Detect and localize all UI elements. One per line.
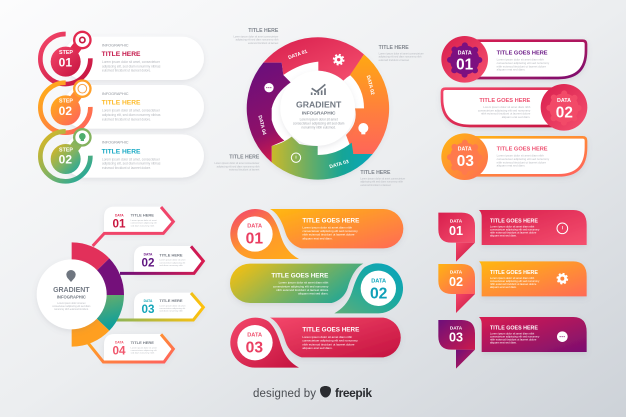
step 2 card: STEP bbox=[59, 99, 73, 105]
callout: title 2: Lorem ipsum dolor sit amet consectetuer bbox=[379, 52, 424, 55]
step 2 card: Lorem ipsum dolor sit amet, consectetuer bbox=[102, 109, 160, 113]
bar 02: nibh euismod tincidunt ut laoreet dolore bbox=[276, 288, 329, 292]
tag row 01: Lorem ipsum dolor sit amet diam nibh bbox=[490, 225, 535, 229]
step 2 card bbox=[40, 79, 204, 133]
panel: step list bbox=[40, 31, 204, 181]
tab 03: consectetuer adipiscing elit bbox=[159, 307, 186, 310]
step 3 card: adipiscing elit, sed diam nonummy nibhas bbox=[102, 162, 161, 166]
tab 04: 04 bbox=[113, 345, 126, 358]
callout: title 2 bbox=[379, 45, 424, 62]
step 3 card: STEP bbox=[59, 147, 73, 153]
step 1 card: 01 bbox=[59, 55, 72, 69]
banner 01 bbox=[441, 36, 586, 83]
callout: title 3: euismod tincidunt ut laoreet bbox=[229, 169, 260, 172]
step 1 card bbox=[40, 31, 204, 84]
step 3 card: TITLE HERE bbox=[102, 148, 141, 155]
tag row 02: DATA bbox=[450, 270, 463, 275]
tag row 01: consectetuer adipiscing elit sed nonummy bbox=[490, 228, 540, 232]
callout: title 2: TITLE HERE bbox=[379, 45, 409, 51]
callout: title 3: Lorem ipsum dolor sit amet consectetuer bbox=[214, 162, 259, 165]
centre circle: INFOGRAPHIC bbox=[57, 295, 86, 300]
bar 01: aliquam erat sed diam. bbox=[302, 236, 333, 240]
tag row 03: nibh euismod tincidunt ut laoreet dolore bbox=[490, 338, 537, 342]
bar 01: nibh euismod tincidunt ut laoreet dolore bbox=[302, 233, 355, 237]
tag row 03: DATA bbox=[450, 325, 463, 330]
centre circle: nonummy nibh euismod tincidunt. bbox=[54, 308, 89, 311]
tab 01: Lorem ipsum dolor sit amet bbox=[131, 219, 157, 222]
tag row 03: aliquam erat sed diam. bbox=[490, 341, 517, 345]
centre circle: Lorem ipsum dolor sit amet bbox=[57, 302, 86, 305]
attribution logo: designed by bbox=[253, 388, 316, 400]
banner 02: consectetuer adipiscing elit sed nonummy bbox=[478, 108, 531, 112]
tag row 02: aliquam erat sed diam. bbox=[490, 285, 517, 289]
step 3 card: Lorem ipsum dolor sit amet, consectetuer bbox=[102, 157, 160, 161]
tab 04: TITLE HERE bbox=[131, 340, 154, 345]
tag row 01: TITLE GOES HERE bbox=[490, 219, 538, 225]
tab 03: 03 bbox=[142, 303, 155, 316]
bar 03: TITLE GOES HERE bbox=[302, 327, 359, 334]
tag row 02 bbox=[438, 261, 587, 313]
step 3 card: 02 bbox=[59, 153, 72, 167]
tag row 03: TITLE GOES HERE bbox=[490, 326, 538, 332]
callout: title 1: euismod tincidunt ut laoreet bbox=[248, 42, 279, 45]
bar 01: consectetuer adipiscing elit sed nonummy bbox=[302, 229, 358, 233]
tab 01: consectetuer adipiscing elit bbox=[131, 222, 157, 225]
tab 01: DATA bbox=[115, 213, 124, 217]
tag row 01: DATA bbox=[450, 218, 463, 223]
chart: gradient donut bbox=[214, 28, 424, 187]
tab 04: Lorem ipsum dolor sit amet bbox=[131, 346, 157, 349]
callout: title 4 bbox=[360, 170, 405, 187]
centre label: GRADIENT bbox=[296, 99, 342, 109]
banner 03: TITLE GOES HERE bbox=[497, 147, 548, 153]
bar 02 bbox=[230, 263, 403, 313]
centre circle: consectetuer adipiscing elit sed diam bbox=[52, 305, 90, 308]
banner 02: nibh euismod tincidunt ut laoreet dolore bbox=[481, 112, 531, 116]
banner 02: 02 bbox=[556, 104, 573, 121]
tab 03: Lorem ipsum dolor sit amet bbox=[159, 304, 186, 307]
tag row 01: nibh euismod tincidunt ut laoreet dolore bbox=[490, 231, 537, 235]
tab 01: 01 bbox=[113, 217, 126, 230]
tab 01: TITLE HERE bbox=[131, 213, 154, 218]
banner 01: nibh euismod tincidunt ut laoreet dolore bbox=[497, 64, 546, 68]
banner 02: aliquam erat sed diam. bbox=[502, 115, 531, 119]
bar 03: nibh euismod tincidunt ut laoreet dolore bbox=[302, 342, 355, 346]
banner 03: aliquam erat sed diam. bbox=[497, 164, 525, 168]
step 2 card: 02 bbox=[59, 104, 72, 118]
bar 02: TITLE GOES HERE bbox=[271, 272, 328, 279]
bar 03: DATA bbox=[247, 332, 262, 338]
callout: title 3: TITLE HERE bbox=[229, 155, 260, 161]
step 1 card: adipiscing elit, sed diam nonummy nibhas bbox=[102, 64, 161, 68]
segment: data 01: DATA 01 bbox=[288, 49, 308, 61]
banner 01: 01 bbox=[456, 56, 474, 73]
callout: title 4: adipiscing elit sed diam nonummy nibh bbox=[360, 181, 404, 184]
callout: title 1: adipiscing elit sed diam nonummy nibh bbox=[236, 39, 279, 42]
attribution logo: freepik bbox=[335, 386, 372, 400]
step 2 card: INFOGRAPHIC bbox=[102, 92, 129, 96]
tag row 02: nibh euismod tincidunt ut laoreet dolore bbox=[490, 282, 537, 286]
callout: title 1: Lorem ipsum dolor sit amet consectetuer bbox=[233, 35, 278, 38]
banner 01: consectetuer adipiscing elit sed nonummy bbox=[497, 61, 550, 65]
callout: title 2: adipiscing elit sed diam nonummy nibh bbox=[379, 56, 422, 59]
bar 03: 03 bbox=[246, 339, 263, 356]
bar 02: 02 bbox=[370, 285, 388, 302]
tab 03: TITLE HERE bbox=[159, 298, 183, 303]
tab 02: Lorem ipsum dolor sit amet bbox=[159, 259, 186, 262]
tag row 03: 03 bbox=[449, 331, 463, 345]
tag row 01 bbox=[438, 210, 587, 262]
tab 03: DATA bbox=[144, 299, 153, 303]
callout: title 3: adipiscing elit sed diam nonummy nibh bbox=[217, 165, 260, 168]
banner 02 bbox=[442, 84, 587, 131]
bar 02: DATA bbox=[371, 278, 386, 284]
segment: data 04 bbox=[247, 63, 291, 162]
segment: data 03 bbox=[272, 137, 373, 180]
step 2 card: adipiscing elit, sed diam nonummy nibhas bbox=[102, 113, 161, 117]
banner 03: Lorem ipsum dolor sit amet diam nibh bbox=[497, 154, 544, 158]
tag row 03: Lorem ipsum dolor sit amet diam nibh bbox=[490, 332, 535, 336]
banner 03: consectetuer adipiscing elit sed nonummy bbox=[497, 157, 550, 161]
bar 02: consectetuer adipiscing elit sed nonummy bbox=[273, 284, 329, 288]
tab 04 bbox=[88, 334, 173, 362]
tab 04: sed diam nonummy nibh bbox=[131, 353, 155, 355]
bar 03 bbox=[230, 318, 401, 368]
bar 02: aliquam erat sed diam. bbox=[298, 292, 328, 296]
centre circle: GRADIENT bbox=[53, 287, 90, 294]
bar 03: Lorem ipsum dolor sit amet diam nibh bbox=[302, 335, 352, 339]
segment: data 02: DATA 02 bbox=[365, 75, 375, 96]
tab 04: consectetuer adipiscing elit bbox=[131, 349, 157, 352]
tab 02: sed diam nonummy nibh bbox=[159, 265, 184, 267]
banner 01: aliquam erat sed diam. bbox=[497, 68, 525, 72]
step 2 card: TITLE HERE bbox=[102, 100, 141, 107]
centre label: consectetuer adipiscing elit sed diam bbox=[293, 122, 345, 126]
tab 02: DATA bbox=[144, 253, 153, 257]
step 3 card bbox=[40, 128, 204, 181]
tag row 02: Lorem ipsum dolor sit amet diam nibh bbox=[490, 276, 535, 280]
bar 03: consectetuer adipiscing elit sed nonummy bbox=[302, 339, 358, 343]
centre label: Lorem ipsum dolor sit amet bbox=[300, 118, 338, 122]
tab 03 bbox=[115, 293, 203, 320]
tab 03: sed diam nonummy nibh bbox=[159, 311, 184, 313]
tag row 02: consectetuer adipiscing elit sed nonummy bbox=[490, 279, 540, 283]
callout: title 3 bbox=[214, 155, 260, 172]
banner 03: DATA bbox=[458, 147, 472, 153]
callout: title 2: euismod tincidunt ut laoreet bbox=[379, 59, 409, 62]
panel: tag banners bbox=[438, 210, 587, 369]
bar 01 bbox=[230, 209, 403, 259]
callout: title 1 bbox=[233, 28, 279, 45]
callout: title 1: TITLE HERE bbox=[248, 28, 279, 34]
tab 02: TITLE HERE bbox=[159, 252, 183, 257]
tag row 02: TITLE GOES HERE bbox=[490, 270, 538, 276]
callout: title 4: euismod tincidunt ut laoreet bbox=[360, 184, 391, 187]
bar 02: Lorem ipsum dolor sit amet diam nibh bbox=[279, 281, 329, 285]
step 3 card: INFOGRAPHIC bbox=[102, 141, 129, 145]
step 3 card: euismod tincidunt ut laoreet dolore. bbox=[102, 166, 151, 170]
banner 01: TITLE GOES HERE bbox=[497, 51, 548, 57]
centre label: INFOGRAPHIC bbox=[302, 111, 336, 117]
centre label bbox=[280, 71, 355, 146]
banner 03 bbox=[441, 133, 586, 180]
step 1 card: INFOGRAPHIC bbox=[102, 43, 129, 47]
step 1 card: STEP bbox=[59, 50, 73, 56]
bar 03: aliquam erat sed diam. bbox=[302, 346, 333, 350]
banner 01: DATA bbox=[458, 50, 472, 56]
segment: data 03: DATA 03 bbox=[329, 159, 350, 170]
step 1 card: Lorem ipsum dolor sit amet, consectetuer bbox=[102, 60, 160, 64]
centre label: nonummy nibh euismod. bbox=[301, 126, 336, 130]
banner 02: TITLE GOES HERE bbox=[479, 98, 531, 104]
banner 01: Lorem ipsum dolor sit amet diam nibh bbox=[497, 58, 544, 62]
bar 01: TITLE GOES HERE bbox=[302, 217, 359, 224]
tab 02 bbox=[120, 246, 203, 273]
tag row 01: aliquam erat sed diam. bbox=[490, 234, 517, 238]
tab 01: sed diam nonummy nibh bbox=[131, 225, 155, 227]
panel: branching diagram bbox=[37, 207, 203, 362]
bar 01: Lorem ipsum dolor sit amet diam nibh bbox=[302, 225, 352, 229]
step 1 card: euismod tincidunt ut laoreet dolore. bbox=[102, 69, 151, 73]
tab 01 bbox=[93, 207, 173, 246]
callout: title 4: Lorem ipsum dolor sit amet consectetuer bbox=[360, 177, 405, 180]
tag row 03 bbox=[438, 317, 587, 369]
callout: title 4: TITLE HERE bbox=[360, 170, 391, 176]
panel: teardrop bars bbox=[230, 209, 403, 368]
banner 02: DATA bbox=[557, 98, 571, 104]
segment: data 04: DATA 04 bbox=[256, 115, 267, 136]
tag row 02: 02 bbox=[449, 275, 463, 289]
centre circle bbox=[37, 259, 107, 329]
segment: data 02 bbox=[346, 54, 389, 154]
step 1 card: TITLE HERE bbox=[102, 51, 141, 58]
tag row 03: consectetuer adipiscing elit sed nonummy bbox=[490, 335, 540, 339]
bar 01: 01 bbox=[246, 230, 263, 247]
banner 03: nibh euismod tincidunt ut laoreet dolore bbox=[497, 160, 546, 164]
attribution logo bbox=[253, 386, 372, 400]
tab 04: DATA bbox=[115, 341, 124, 345]
panel: data banners bbox=[441, 36, 587, 180]
banner 03: 03 bbox=[457, 153, 474, 170]
banner 02: Lorem ipsum dolor sit amet diam nibh bbox=[483, 105, 531, 109]
tab 02: consectetuer adipiscing elit bbox=[159, 261, 186, 264]
tab 02: 02 bbox=[142, 257, 155, 270]
ring segments bbox=[72, 242, 124, 347]
tag row 01: 01 bbox=[449, 224, 463, 238]
step 2 card: euismod tincidunt ut laoreet dolore. bbox=[102, 117, 151, 121]
bar 01: DATA bbox=[247, 224, 262, 230]
segment: data 01 bbox=[263, 37, 364, 81]
